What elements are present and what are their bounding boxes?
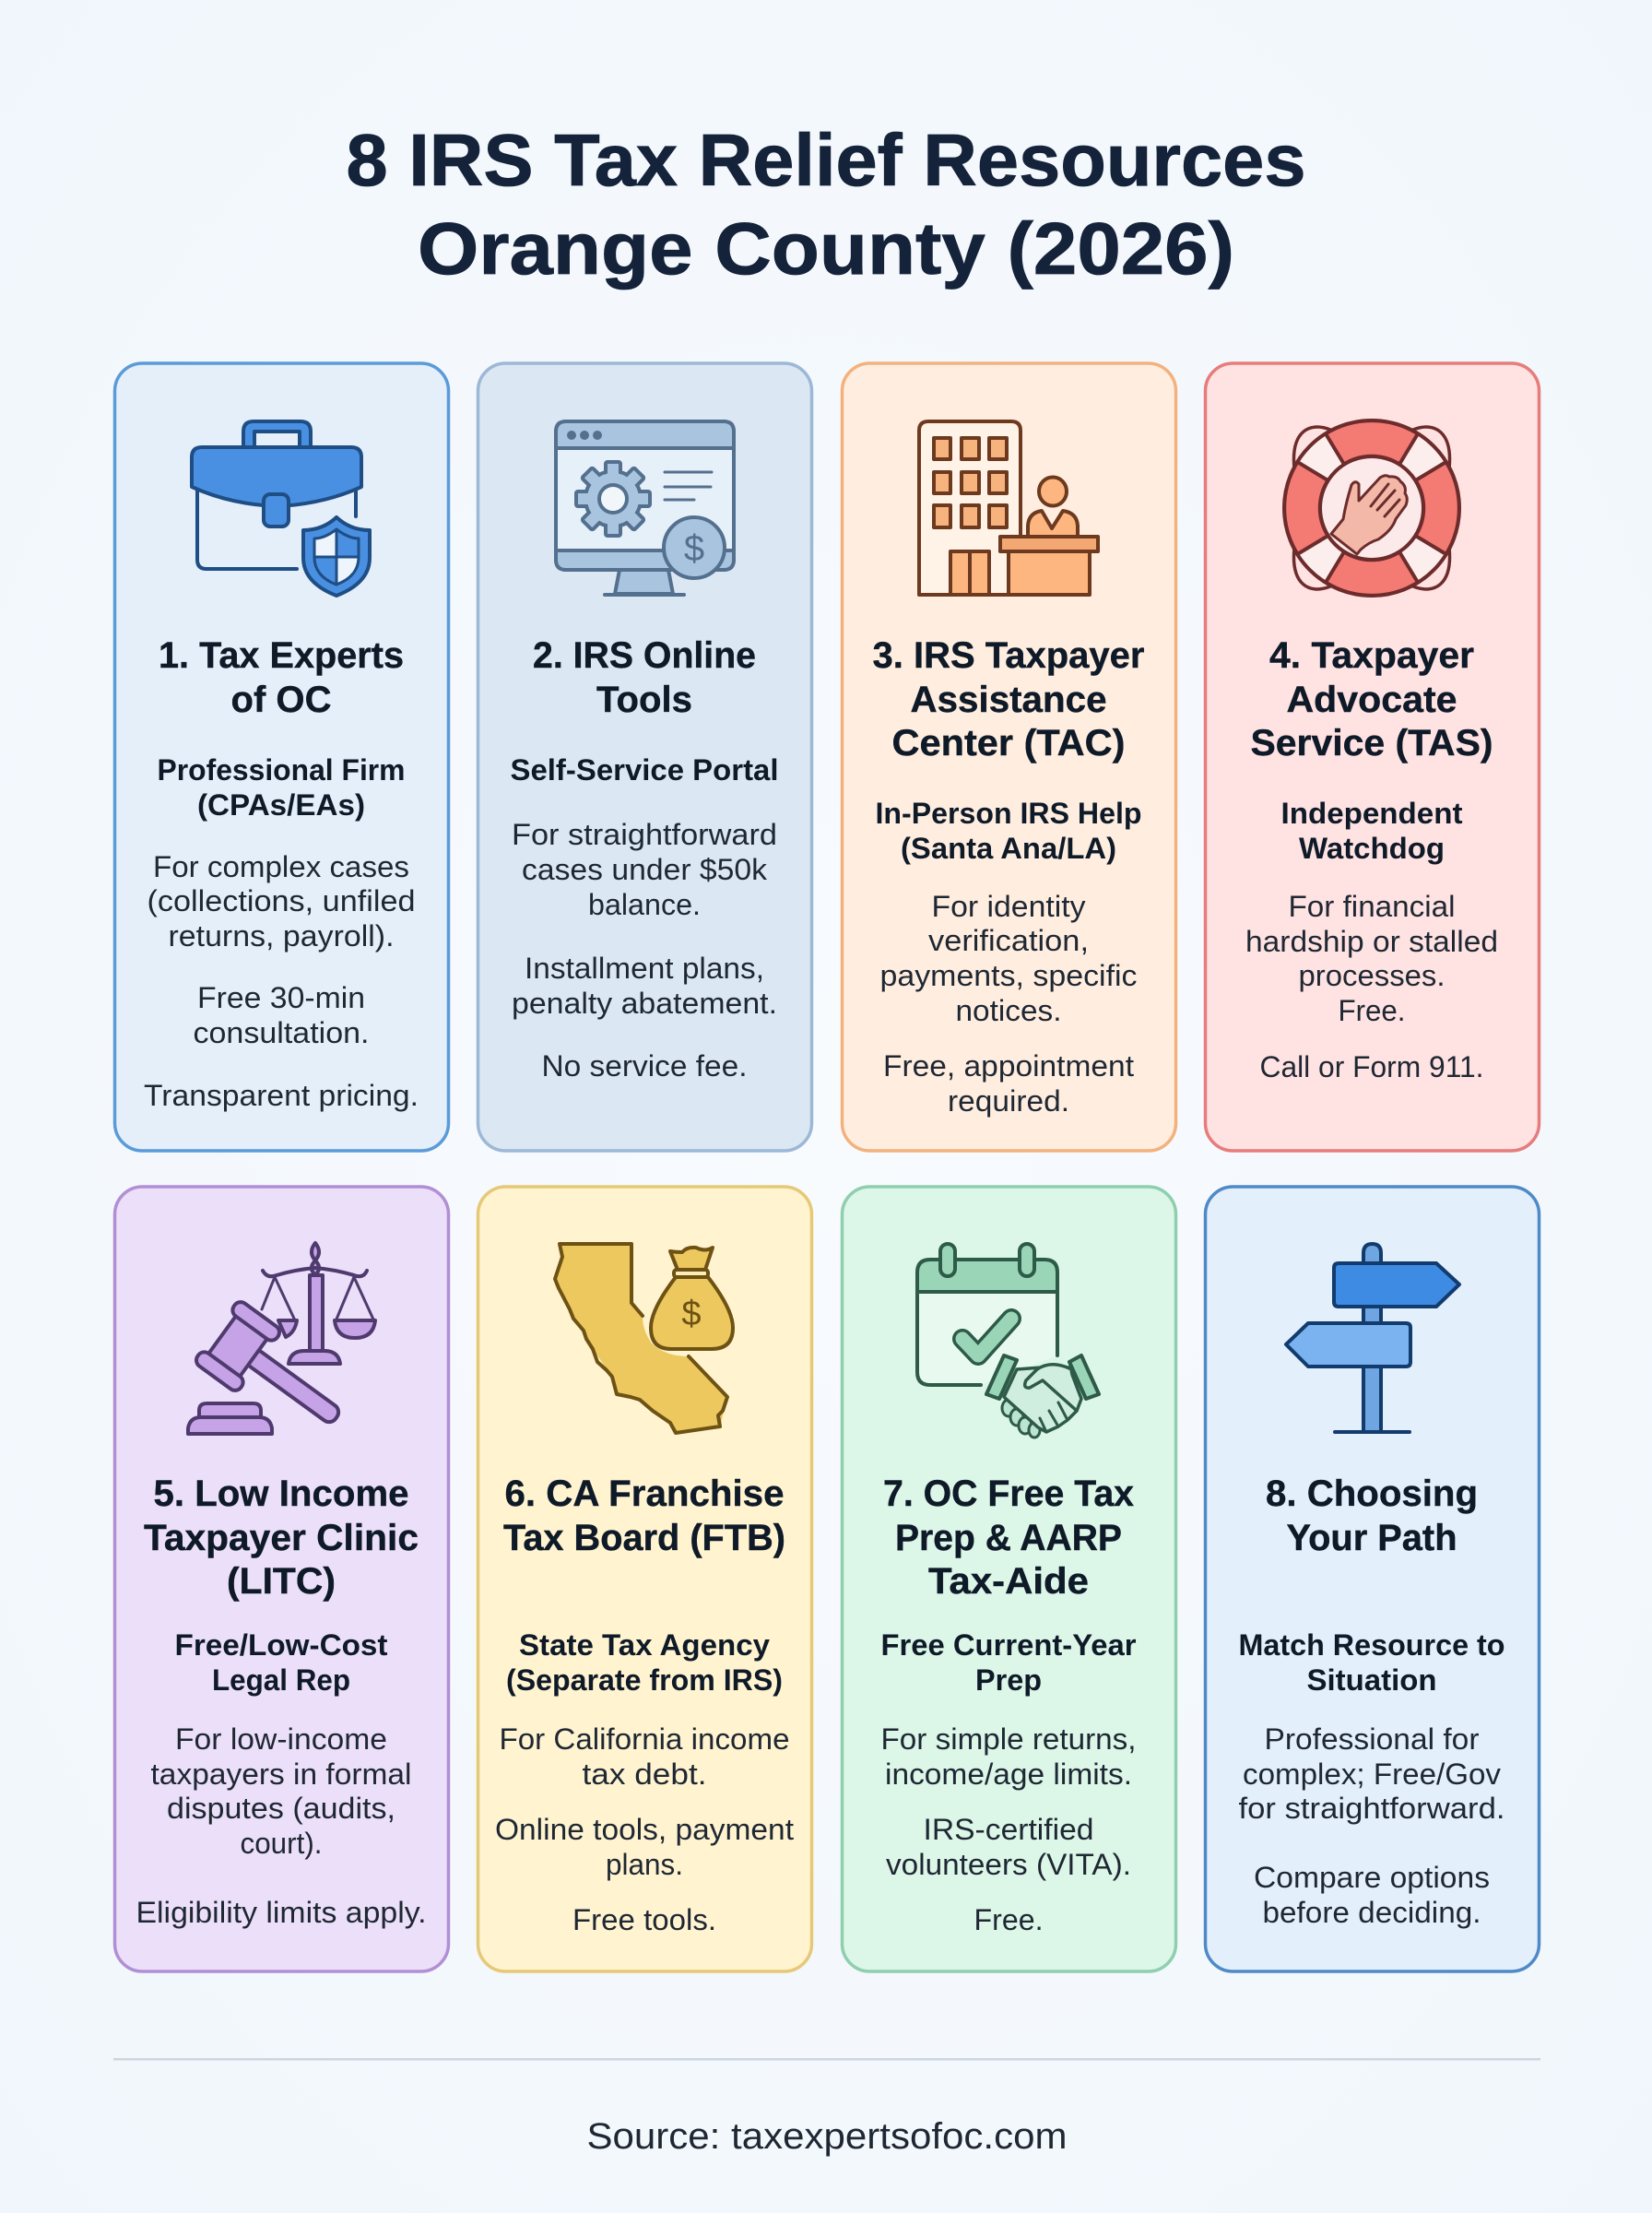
icon: California map and money bag: $	[681, 1295, 702, 1333]
subheading: Situation	[1307, 1663, 1436, 1697]
heading: Tax-Aide	[928, 1561, 1089, 1602]
body text: Free.	[974, 1903, 1044, 1936]
subheading: (Santa Ana/LA)	[901, 832, 1116, 865]
subheading: Legal Rep	[212, 1663, 350, 1697]
body text: For financial	[1289, 890, 1455, 923]
title: 8 IRS Tax Relief Resources	[347, 119, 1305, 201]
body text: notices.	[955, 994, 1062, 1027]
subheading	[1281, 797, 1463, 865]
heading: 7. OC Free Tax	[883, 1473, 1134, 1514]
body text	[495, 1722, 794, 1936]
subheading: (Separate from IRS)	[506, 1663, 783, 1697]
subheading	[876, 797, 1141, 865]
body text: IRS-certified	[924, 1813, 1093, 1846]
heading	[1266, 1473, 1478, 1558]
icon: briefcase with shield	[192, 421, 370, 596]
body text: balance.	[588, 888, 701, 921]
body text: consultation.	[194, 1016, 369, 1049]
heading: Prep & AARP	[895, 1518, 1122, 1558]
title: Orange County (2026)	[418, 207, 1234, 290]
subheading: State Tax Agency	[519, 1628, 770, 1662]
panel: 5. Low Income Taxpayer Clinic	[114, 1187, 448, 1971]
body text: penalty abatement.	[512, 987, 777, 1020]
body text: No service fee.	[542, 1049, 747, 1083]
heading: Assistance	[911, 680, 1106, 720]
body text: for straightforward.	[1239, 1792, 1504, 1825]
heading	[872, 635, 1145, 763]
heading: 3. IRS Taxpayer	[872, 635, 1145, 676]
heading: Your Path	[1287, 1518, 1457, 1558]
body text: Free 30-min	[197, 981, 365, 1014]
body text	[1239, 1722, 1504, 1929]
subheading: Free/Low-Cost	[175, 1628, 388, 1662]
panel: 2. IRS Online Tools	[478, 363, 811, 1151]
body text	[879, 890, 1138, 1118]
heading: of OC	[230, 680, 332, 720]
body text	[136, 1722, 426, 1929]
heading: 5. Low Income	[153, 1473, 409, 1514]
heading: Advocate	[1287, 680, 1457, 720]
subheading: Independent	[1281, 797, 1463, 830]
subheading	[506, 1628, 783, 1697]
body text: income/age limits.	[885, 1757, 1132, 1791]
body text: Eligibility limits apply.	[136, 1896, 426, 1929]
body text: required.	[948, 1084, 1069, 1118]
icon: calendar with check mark and handshake	[917, 1244, 1099, 1438]
body text: court).	[240, 1827, 323, 1860]
heading	[533, 635, 756, 720]
subheading	[157, 753, 406, 822]
body text: Call or Form 911.	[1259, 1050, 1484, 1083]
heading: 4. Taxpayer	[1269, 635, 1474, 676]
heading: Tax Board (FTB)	[503, 1518, 785, 1558]
panel: 1. Tax Experts of OC	[114, 363, 448, 1151]
heading	[144, 1473, 419, 1602]
body text: disputes (audits,	[167, 1792, 395, 1825]
body text: taxpayers in formal	[151, 1757, 411, 1791]
subheading: Free Current-Year	[881, 1628, 1136, 1662]
subheading: Professional Firm	[157, 753, 406, 787]
body text	[144, 850, 419, 1112]
subheading: In-Person IRS Help	[876, 797, 1141, 830]
body text	[881, 1722, 1136, 1936]
panel: 4. Taxpayer Advocate Service	[1206, 363, 1540, 1151]
body text: Transparent pricing.	[144, 1079, 419, 1112]
icon: office building and service desk	[919, 421, 1098, 595]
subheading	[1239, 1628, 1504, 1697]
body text: Free tools.	[572, 1903, 716, 1936]
subheading: Match Resource to	[1239, 1628, 1504, 1662]
heading	[1250, 635, 1493, 763]
icon: California map and money bag	[555, 1244, 733, 1433]
body text: Installment plans,	[525, 952, 764, 985]
body text: For straightforward	[512, 818, 777, 851]
body text: For identity	[931, 890, 1086, 923]
heading: Service (TAS)	[1250, 723, 1493, 763]
panel: 3. IRS Taxpayer Assistance Center	[843, 363, 1176, 1151]
body text: Compare options	[1254, 1861, 1490, 1894]
panel: 6. CA Franchise Tax Board	[478, 1187, 811, 1971]
body text	[512, 818, 777, 1083]
body text: Free, appointment	[883, 1049, 1134, 1083]
icon: computer monitor with gear and dollar coin	[556, 421, 734, 595]
title	[347, 119, 1305, 290]
body text: (collections, unfiled	[148, 884, 415, 917]
body text: verification,	[928, 924, 1089, 957]
subheading: Prep	[975, 1663, 1042, 1697]
body text: before deciding.	[1263, 1896, 1481, 1929]
body text: For low-income	[175, 1722, 387, 1756]
panel: 7. OC Free Tax Prep and AARP Tax-Aide	[843, 1187, 1176, 1971]
body text: For complex cases	[153, 850, 409, 883]
icon: life preserver with hand	[1284, 420, 1459, 596]
heading	[503, 1473, 785, 1558]
body text: cases under $50k	[522, 853, 768, 886]
heading: Tools	[596, 680, 692, 720]
heading: 1. Tax Experts	[159, 635, 404, 676]
body text: For simple returns,	[881, 1722, 1136, 1756]
body text	[1245, 890, 1498, 1083]
heading: Center (TAC)	[892, 723, 1125, 763]
icon: gavel and scales of justice	[188, 1243, 375, 1450]
heading: 8. Choosing	[1266, 1473, 1478, 1514]
heading: (LITC)	[227, 1561, 336, 1602]
body text: payments, specific	[879, 959, 1138, 992]
body text: For California income	[500, 1722, 789, 1756]
subheading	[881, 1628, 1136, 1697]
panel: 8. Choosing Your Path	[1206, 1187, 1540, 1971]
icon: signpost	[1286, 1244, 1459, 1432]
heading: Taxpayer Clinic	[144, 1518, 419, 1558]
subheading: Self-Service Portal	[511, 753, 778, 787]
body text: plans.	[606, 1848, 683, 1881]
source line: Source: taxexpertsofoc.com	[586, 2116, 1068, 2157]
subheading: Watchdog	[1299, 832, 1445, 865]
subheading	[175, 1628, 388, 1697]
heading: 6. CA Franchise	[505, 1473, 784, 1514]
heading	[883, 1473, 1134, 1602]
subheading: (CPAs/EAs)	[197, 788, 365, 822]
heading: 2. IRS Online	[533, 635, 756, 676]
body text: volunteers (VITA).	[886, 1848, 1131, 1881]
body text: processes.	[1298, 959, 1446, 992]
body text: complex; Free/Gov	[1243, 1757, 1501, 1791]
body text: Professional for	[1265, 1722, 1480, 1756]
heading	[159, 635, 404, 720]
icon: computer monitor with gear and dollar coin: $	[684, 528, 704, 569]
body text: Free.	[1339, 994, 1405, 1027]
body text: hardship or stalled	[1245, 925, 1498, 958]
body text: returns, payroll).	[168, 919, 395, 953]
body text: tax debt.	[583, 1757, 706, 1791]
body text: Online tools, payment	[495, 1813, 794, 1846]
